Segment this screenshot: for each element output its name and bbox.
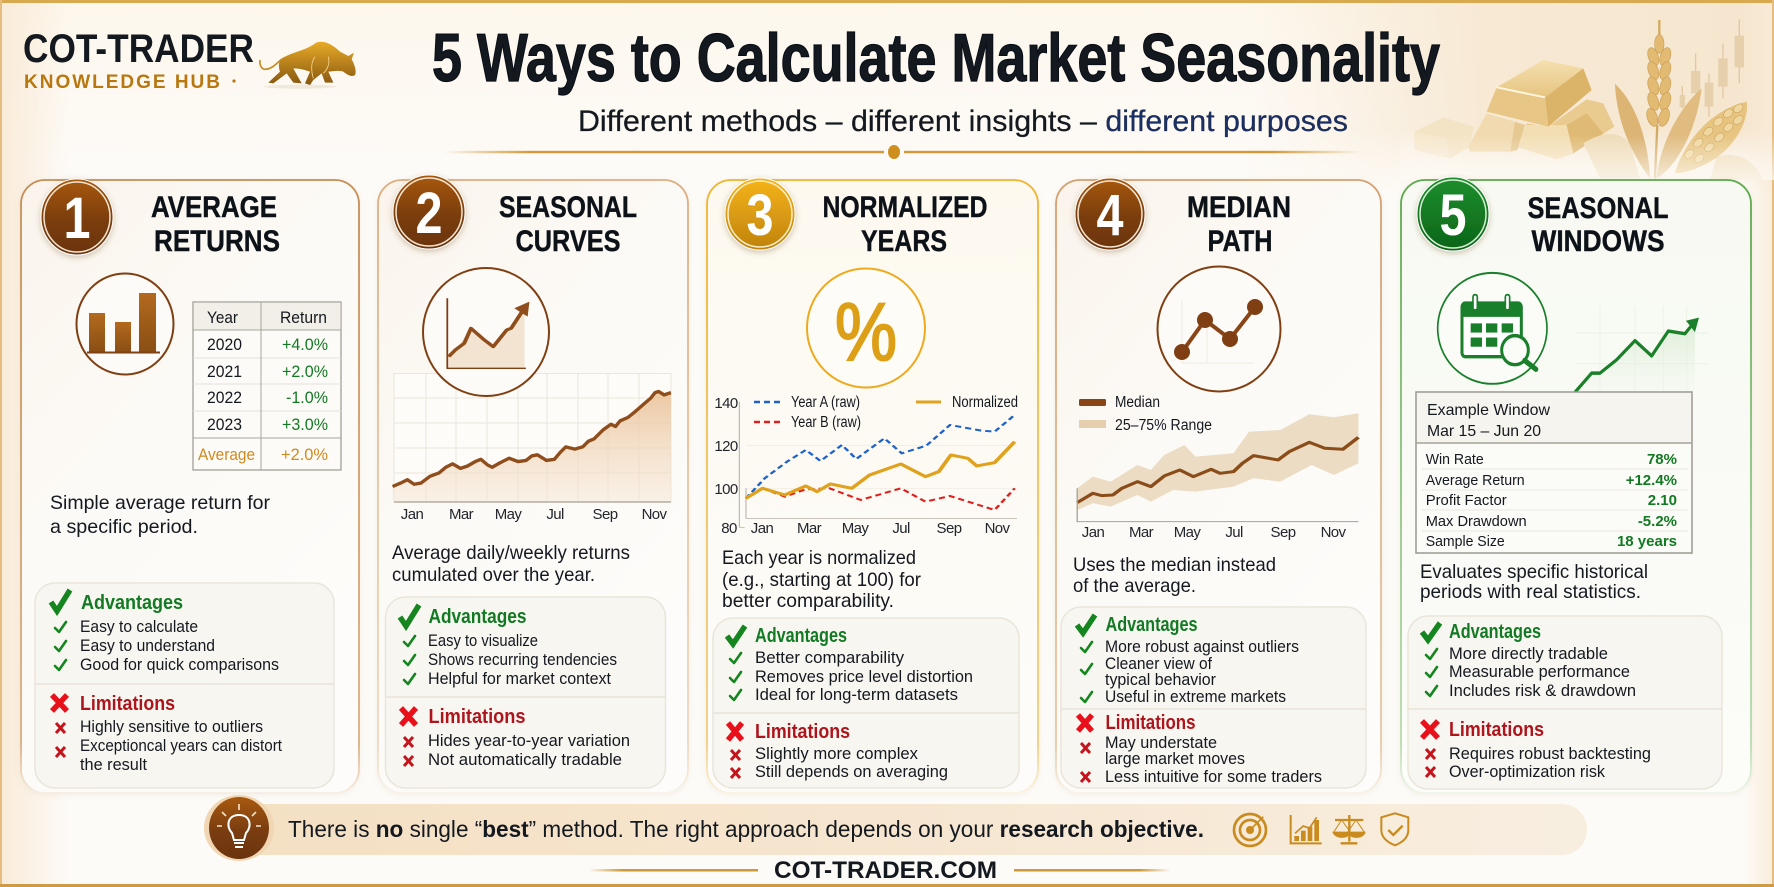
- table: yearly returns: Year: [207, 308, 238, 327]
- icon: target: [1234, 814, 1266, 846]
- line chart: Nov: [642, 506, 668, 523]
- description: Uses the median instead: [1073, 554, 1276, 576]
- chart legend: 25–75% Range: [1115, 417, 1212, 434]
- chart legend: Normalized: [952, 394, 1018, 411]
- description: Average daily/weekly returns: [392, 542, 630, 564]
- heading: [1528, 192, 1668, 258]
- line chart: raw vs normalized: Mar: [797, 520, 822, 537]
- heading: YEARS: [861, 225, 947, 258]
- limitations: Less intuitive for some traders: [1105, 768, 1322, 786]
- line chart: raw vs normalized: Nov: [985, 520, 1011, 537]
- heading: [499, 191, 637, 258]
- axis labels: 120: [714, 438, 738, 455]
- chart legend: [1079, 394, 1212, 434]
- logo wordmark: COT-TRADER: [23, 27, 254, 71]
- table: example window stats: -5.2%: [1638, 513, 1677, 530]
- advantages: More robust against outliers: [1105, 638, 1299, 656]
- limitations: Limitations: [1449, 719, 1544, 741]
- description: (e.g., starting at 100) for: [722, 569, 921, 591]
- advantages: Advantages: [755, 625, 847, 647]
- limitations: Limitations: [1106, 712, 1196, 734]
- advantages: More directly tradable: [1449, 645, 1608, 663]
- icon: bar chart: [76, 274, 174, 374]
- icon: shield check: [1381, 813, 1408, 845]
- badge 1: 1: [64, 186, 90, 251]
- advantages: Advantages: [1449, 621, 1541, 643]
- advantages: [1422, 621, 1636, 700]
- table: yearly returns: 2022: [207, 388, 242, 407]
- badge 1: [41, 179, 113, 255]
- line chart: Jan: [401, 506, 423, 523]
- band chart: median with range: May: [1174, 524, 1201, 541]
- footer website: COT-TRADER.COM: [774, 857, 997, 884]
- table: example window stats: 2.10: [1648, 492, 1677, 509]
- limitations: Hides year-to-year variation: [428, 732, 630, 750]
- limitations: the result: [80, 756, 147, 774]
- chart legend: [754, 394, 1018, 431]
- table: example window stats: Example Window: [1427, 402, 1550, 419]
- description: cumulated over the year.: [392, 564, 595, 586]
- description: a specific period.: [50, 516, 198, 538]
- table: example window stats: Max Drawdown: [1426, 513, 1527, 530]
- icon: percent: %: [835, 287, 897, 378]
- description: Simple average return for: [50, 492, 270, 514]
- icon: calendar with magnifier: [1438, 273, 1547, 384]
- advantages: Advantages: [1106, 614, 1198, 636]
- panel: 3 normalized years: [707, 178, 1038, 793]
- description: Each year is normalized: [722, 547, 916, 569]
- limitations: Exceptioncal years can distort: [80, 737, 282, 755]
- table: yearly returns: 2021: [207, 362, 242, 381]
- icon: growth chart: [1291, 815, 1322, 843]
- description: [722, 547, 921, 612]
- band chart: median with range: Mar: [1129, 524, 1154, 541]
- pros and cons: [1408, 616, 1722, 789]
- table: example window stats: Profit Factor: [1426, 492, 1507, 509]
- limitations: [52, 693, 282, 774]
- description: [50, 492, 270, 538]
- description: [392, 542, 630, 586]
- table: yearly returns: +2.0%: [281, 445, 328, 464]
- description: of the average.: [1073, 575, 1196, 597]
- advantages: Advantages: [428, 606, 526, 628]
- pros and cons: [386, 597, 666, 788]
- table: example window stats: 78%: [1647, 451, 1677, 468]
- heading: [822, 191, 988, 258]
- subtitle: Different methods – different insights – different purposes: [578, 105, 1348, 138]
- advantages: Easy to visualize: [428, 632, 538, 650]
- line chart: raw vs normalized: May: [842, 520, 869, 537]
- advantages: [1077, 614, 1299, 706]
- table: example window stats: [1416, 392, 1692, 553]
- band chart: median with range: [1077, 413, 1358, 541]
- heading: RETURNS: [154, 225, 280, 258]
- advantages: Better comparability: [755, 649, 905, 667]
- limitations: Over-optimization risk: [1449, 763, 1606, 781]
- advantages: Advantages: [81, 592, 183, 614]
- badge 4: 4: [1096, 183, 1124, 248]
- table: yearly returns: [193, 302, 341, 470]
- table: example window stats: Sample Size: [1426, 533, 1505, 550]
- small left bar: [1468, 113, 1515, 152]
- wheat: [1655, 20, 1659, 178]
- table: yearly returns: 2023: [207, 415, 242, 434]
- title: 5 Ways to Calculate Market Seasonality: [432, 20, 1440, 96]
- badge 4: [1075, 178, 1145, 250]
- advantages: [400, 605, 617, 688]
- axis labels: 80: [721, 520, 737, 537]
- chart legend: Year B (raw): [791, 414, 861, 431]
- candlesticks: [1680, 19, 1744, 117]
- line chart: raw vs normalized: [714, 394, 1018, 537]
- heading: SEASONAL: [499, 191, 637, 224]
- heading: MEDIAN: [1187, 191, 1291, 224]
- limitations: [401, 706, 630, 769]
- table: yearly returns: 2020: [207, 335, 242, 354]
- far left bar: [1414, 117, 1474, 158]
- limitations: Highly sensitive to outliers: [80, 718, 263, 736]
- lower right bar: [1518, 99, 1614, 153]
- limitations: May understate: [1105, 734, 1217, 752]
- heading: [1187, 191, 1291, 258]
- line chart: raw vs normalized: Jul: [892, 520, 910, 537]
- table: example window stats: +12.4%: [1626, 472, 1677, 489]
- advantages: Includes risk & drawdown: [1449, 682, 1636, 700]
- table: yearly returns: Average: [198, 445, 255, 464]
- logo subtitle: KNOWLEDGE HUB: [24, 72, 220, 93]
- line chart: Sep: [593, 506, 618, 523]
- heading: SEASONAL: [1528, 192, 1668, 225]
- badge 3: [725, 178, 795, 250]
- axis labels: 100: [714, 481, 738, 498]
- icon: bull: [260, 42, 356, 89]
- logo: [23, 27, 356, 93]
- badge 2: [393, 175, 465, 249]
- limitations: large market moves: [1105, 750, 1245, 768]
- advantages: typical behavior: [1105, 671, 1216, 689]
- description: better comparability.: [722, 590, 894, 612]
- corn: [1675, 102, 1747, 173]
- pros and cons: [35, 583, 334, 788]
- advantages: Ideal for long-term datasets: [755, 686, 958, 704]
- heading: CURVES: [516, 225, 620, 258]
- limitations: [1422, 719, 1651, 781]
- heading: PATH: [1208, 225, 1272, 258]
- table: yearly returns: Return: [280, 308, 327, 327]
- icon: light bulb: [204, 795, 274, 861]
- callout banner: [204, 795, 1587, 861]
- panel: 1 average returns: [21, 179, 359, 793]
- description: [1073, 554, 1276, 597]
- limitations: [1078, 712, 1322, 786]
- advantages: Good for quick comparisons: [80, 656, 279, 674]
- chart legend: Median: [1115, 394, 1160, 411]
- advantages: Shows recurring tendencies: [428, 651, 617, 669]
- chart: rising green line: [1575, 306, 1708, 392]
- limitations: Not automatically tradable: [428, 751, 622, 769]
- limitations: Still depends on averaging: [755, 763, 948, 781]
- limitations: Requires robust backtesting: [1449, 745, 1651, 763]
- axis labels: 140: [714, 395, 738, 412]
- table: yearly returns: +3.0%: [282, 415, 328, 434]
- description: periods with real statistics.: [1420, 581, 1641, 603]
- description: [1420, 561, 1648, 603]
- chart legend: Year A (raw): [791, 394, 860, 411]
- advantages: Easy to calculate: [80, 618, 198, 636]
- heading: AVERAGE: [151, 191, 277, 224]
- advantages: Cleaner view of: [1105, 655, 1212, 673]
- limitations: Limitations: [755, 721, 850, 743]
- advantages: Removes price level distortion: [755, 668, 973, 686]
- pros and cons: [713, 618, 1019, 788]
- decorative fade under illustration: [1400, 135, 1774, 180]
- band chart: median with range: Jan: [1082, 524, 1104, 541]
- panel: 2 seasonal curves: [378, 175, 688, 793]
- icon: balance scale: [1332, 815, 1366, 843]
- table: yearly returns: -1.0%: [286, 388, 328, 407]
- advantages: Helpful for market context: [428, 670, 611, 688]
- line chart: raw vs normalized: Jan: [751, 520, 773, 537]
- limitations: Limitations: [80, 693, 175, 715]
- advantages: Useful in extreme markets: [1105, 688, 1286, 706]
- badge 3: 3: [746, 183, 774, 248]
- callout text: There is no single “best” method. The right approach depends on your research objective.: [288, 816, 1204, 842]
- icon: percent: [807, 268, 925, 388]
- limitations: [728, 721, 948, 781]
- panel: 4 median path: [1056, 178, 1381, 793]
- table: example window stats: Win Rate: [1426, 451, 1484, 468]
- band chart: median with range: Nov: [1321, 524, 1347, 541]
- header divider: [443, 145, 1362, 159]
- heading: [151, 191, 280, 258]
- leaves and husk: [1583, 134, 1640, 178]
- axis labels: [714, 395, 738, 537]
- panel: 5 seasonal windows: [1401, 177, 1751, 793]
- table: example window stats: 18 years: [1617, 533, 1677, 550]
- badge 5: [1417, 177, 1489, 251]
- band chart: median with range: Jul: [1225, 524, 1243, 541]
- line chart: May: [495, 506, 522, 523]
- line chart: Mar: [449, 506, 474, 523]
- badge 2: 2: [416, 181, 442, 246]
- table: yearly returns: +4.0%: [282, 335, 328, 354]
- line chart: Jul: [546, 506, 564, 523]
- icon: median line: [1158, 266, 1280, 392]
- limitations: Limitations: [428, 706, 526, 728]
- advantages: [51, 590, 279, 674]
- advantages: Measurable performance: [1449, 663, 1630, 681]
- limitations: Slightly more complex: [755, 745, 919, 763]
- pros and cons: [1061, 607, 1366, 788]
- advantages: [727, 625, 973, 704]
- heading: WINDOWS: [1532, 225, 1664, 258]
- table: yearly returns: +2.0%: [282, 362, 328, 381]
- line chart: [393, 373, 671, 523]
- top bar: [1497, 60, 1583, 97]
- description: Evaluates specific historical: [1420, 561, 1648, 583]
- icon: curve chart: [423, 268, 549, 396]
- table: example window stats: Average Return: [1426, 472, 1525, 489]
- badge 5: 5: [1440, 183, 1466, 248]
- band chart: median with range: Sep: [1271, 524, 1296, 541]
- table: example window stats: Mar 15 – Jun 20: [1427, 423, 1541, 440]
- advantages: Easy to understand: [80, 637, 215, 655]
- decorative illustration: gold bars, wheat, corn and candlesticks: [1414, 19, 1763, 180]
- heading: NORMALIZED: [822, 191, 988, 224]
- line chart: raw vs normalized: Sep: [937, 520, 962, 537]
